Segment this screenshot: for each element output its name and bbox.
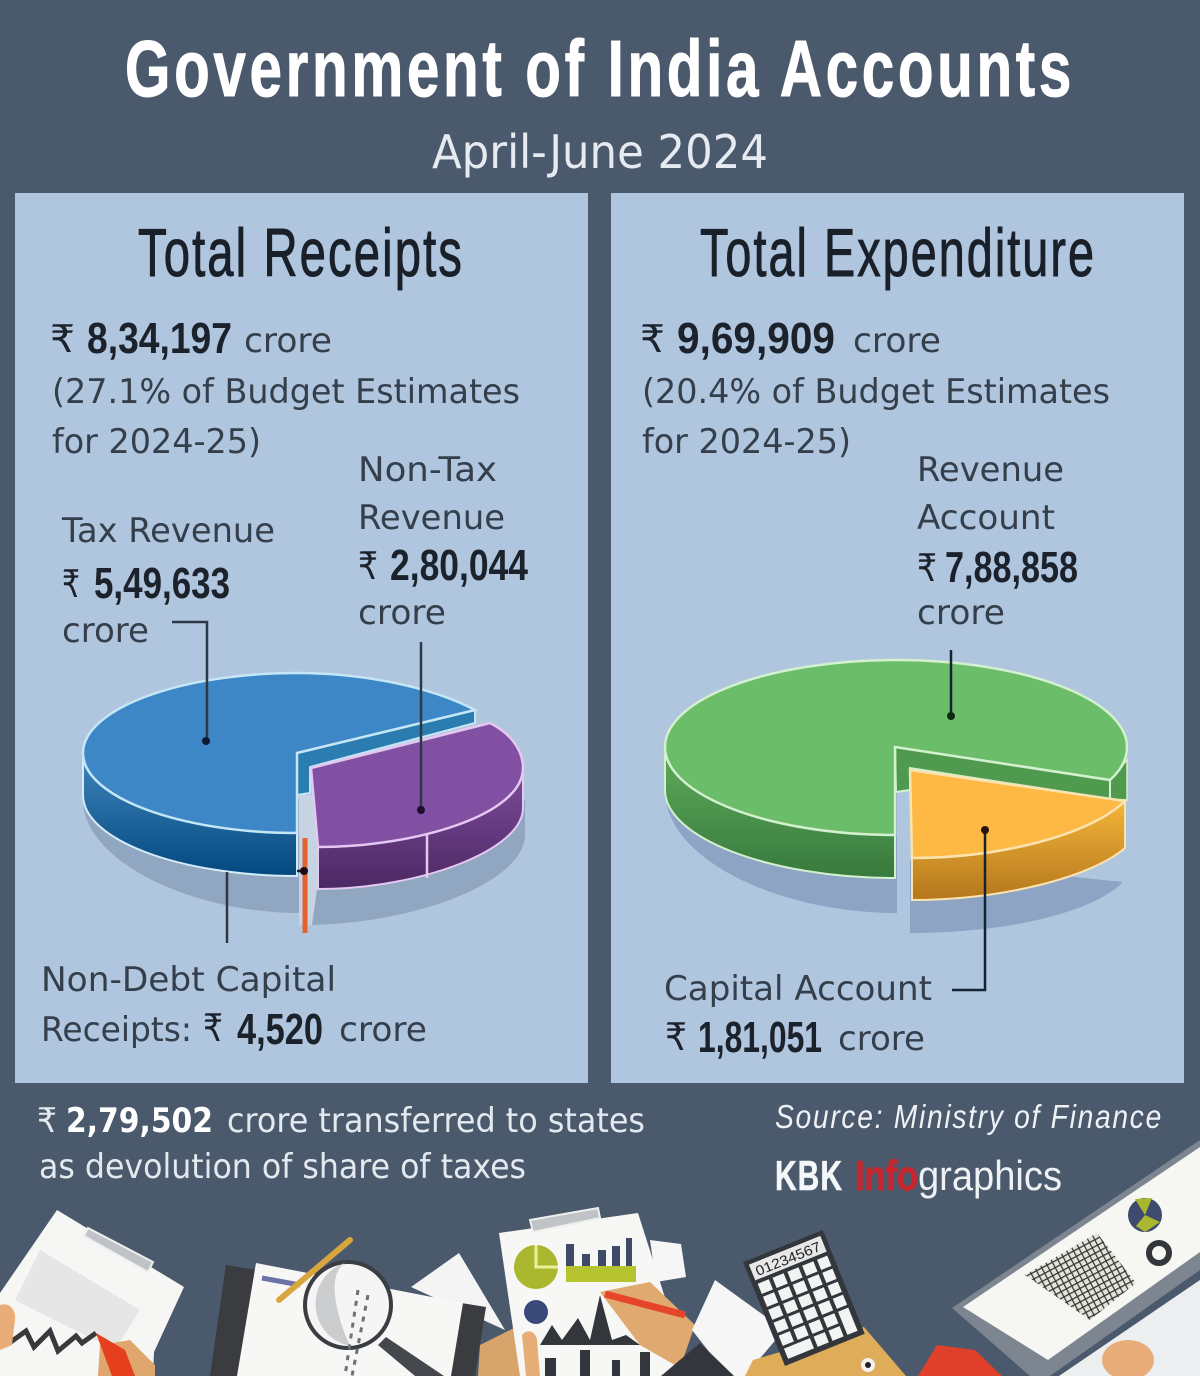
label: non-tax revenue: [358, 450, 528, 633]
label: tax revenue: [61, 511, 275, 651]
illustration: calculator: [745, 1232, 863, 1364]
panel: total receipts: [15, 193, 588, 1083]
label: tax revenue: ₹: [62, 562, 80, 606]
illustration: clipboard with charts and hand: [478, 1208, 695, 1376]
budget estimate note: (20.4% of Budget Estimates: [642, 372, 1110, 412]
total receipts figure: [50, 314, 332, 363]
slice: revenue account top: [665, 660, 1127, 835]
budget estimate note: [642, 372, 1110, 462]
label: non-debt capital receipts: 4,520: [237, 1005, 323, 1054]
total expenditure figure: crore: [853, 321, 941, 361]
budget estimate note: for 2024-25): [642, 422, 851, 462]
illustration: clipboard with hand drawing: [0, 1210, 184, 1376]
label: non-debt capital receipts: Receipts:: [41, 1010, 192, 1050]
heading: total receipts: Total Receipts: [138, 215, 464, 291]
label: capital account: [664, 969, 932, 1062]
label: non-debt capital receipts: crore: [339, 1010, 427, 1050]
total receipts figure: ₹: [50, 317, 75, 361]
label: capital account: 1,81,051: [698, 1013, 822, 1062]
label: revenue account: ₹: [917, 546, 937, 590]
illustration: laptop: [952, 1140, 1200, 1380]
slice: revenue account inner wall: [895, 747, 1110, 799]
slice: tax revenue inner wall: [297, 710, 475, 795]
leader lines: receipts: [172, 622, 425, 943]
illustration: papers and phone: [661, 1280, 784, 1376]
pie chart: receipts: [83, 673, 525, 933]
label: non-debt capital receipts: ₹: [203, 1006, 223, 1050]
credit: KBK Infographics: graphics: [918, 1152, 1062, 1199]
slice: revenue account side wall: [665, 747, 895, 878]
credit: KBK Infographics: KBK: [775, 1152, 843, 1199]
subtitle: April-June 2024: [432, 125, 768, 179]
slice: non-tax top: [311, 723, 523, 847]
label: tax revenue: 5,49,633: [94, 559, 230, 608]
label: capital account: crore: [838, 1019, 925, 1059]
leader lines: expenditure: [947, 650, 989, 990]
slice: capital account side wall: [912, 801, 1125, 900]
bottom white strip: [0, 1376, 1200, 1380]
label: non-tax revenue: Revenue: [358, 498, 505, 538]
pie shadow: [83, 800, 525, 925]
total expenditure figure: ₹: [640, 317, 665, 361]
label: non-tax revenue: ₹: [358, 544, 378, 588]
slice: non-debt capital receipts: [299, 795, 317, 933]
slice: non-tax side wall: [318, 768, 523, 889]
illustration: folder: [745, 1327, 906, 1376]
budget estimate note: for 2024-25): [52, 422, 261, 462]
label: non-debt capital receipts: Non-Debt Capital: [41, 960, 336, 1000]
slice: tax revenue side wall: [83, 753, 297, 876]
slice: tax revenue top: [83, 673, 475, 833]
label: revenue account: crore: [917, 593, 1005, 633]
devolution note: crore transferred to states: [227, 1101, 645, 1141]
devolution note: ₹: [37, 1101, 57, 1141]
total receipts figure: 8,34,197: [87, 314, 232, 363]
illustration: red object: [918, 1345, 1002, 1376]
illustration: calculator: 01234567: [753, 1238, 823, 1279]
budget estimate note: [52, 372, 520, 462]
label: non-tax revenue: 2,80,044: [390, 541, 528, 590]
devolution note: 2,79,502: [66, 1101, 213, 1141]
pie chart: expenditure: [665, 660, 1127, 933]
label: revenue account: 7,88,858: [945, 543, 1078, 592]
total receipts figure: crore: [244, 321, 332, 361]
slice: revenue account right corner wall: [1110, 760, 1127, 800]
label: revenue account: [917, 450, 1078, 633]
label: tax revenue: Tax Revenue: [61, 511, 275, 551]
pie shadow: [665, 790, 1123, 933]
label: non-tax revenue: Non-Tax: [358, 450, 497, 490]
label: non-debt capital receipts: [41, 960, 427, 1054]
devolution note: as devolution of share of taxes: [39, 1147, 526, 1187]
credit: KBK Infographics: Info: [855, 1152, 918, 1199]
illustration: notebook with magnifier and pencil: [210, 1240, 505, 1376]
devolution note: [37, 1101, 645, 1187]
label: revenue account: Account: [917, 498, 1055, 538]
label: non-tax revenue: crore: [358, 593, 446, 633]
credit: KBK Infographics: [775, 1152, 1062, 1199]
slice: capital account top: [910, 770, 1125, 858]
total expenditure figure: 9,69,909: [677, 314, 835, 363]
label: revenue account: Revenue: [917, 450, 1064, 490]
label: capital account: Capital Account: [664, 969, 932, 1009]
budget estimate note: (27.1% of Budget Estimates: [52, 372, 520, 412]
total expenditure figure: [640, 314, 941, 363]
label: tax revenue: crore: [62, 611, 149, 651]
panel: total expenditure: [611, 193, 1184, 1083]
label: capital account: ₹: [665, 1015, 687, 1059]
